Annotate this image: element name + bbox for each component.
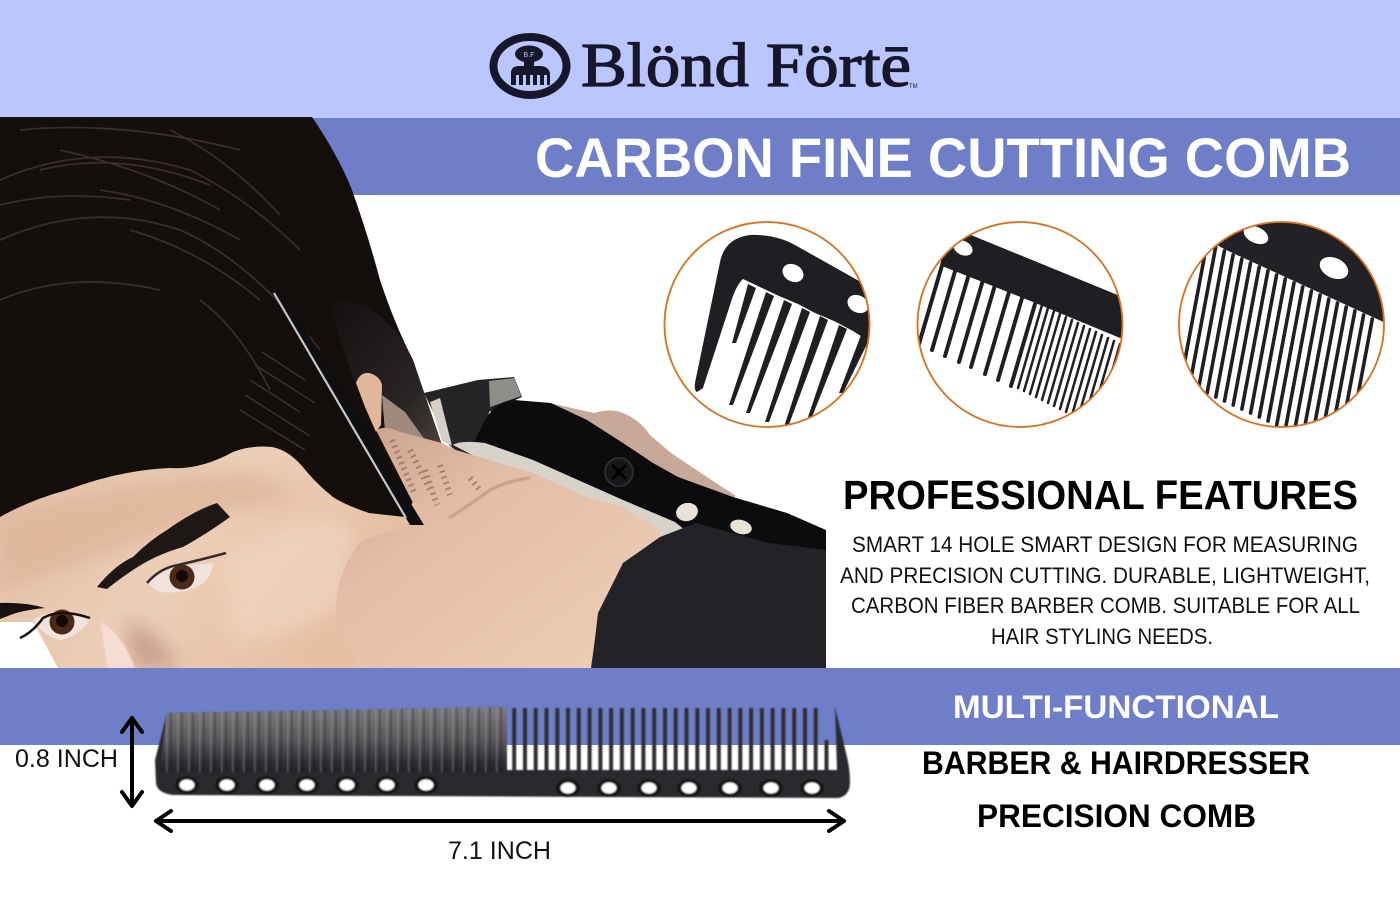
comb in hand <box>272 288 424 525</box>
ear <box>356 373 382 432</box>
clipper silver detail <box>489 378 521 407</box>
eye left <box>20 610 90 640</box>
hair highlights <box>0 128 320 390</box>
hand <box>336 428 660 668</box>
heading: professional features: PROFESSIONAL FEATURES <box>843 472 1358 518</box>
clipper blade teeth <box>430 398 452 446</box>
face <box>0 446 424 668</box>
finger hair <box>392 440 480 505</box>
clipper buttons <box>676 502 698 522</box>
comb holes <box>175 776 824 797</box>
circle: wide-tooth comb end <box>664 222 875 427</box>
eyebrow lower left <box>0 603 45 619</box>
features description <box>840 532 1370 649</box>
temple highlight <box>232 521 349 636</box>
arrow: comb width <box>156 811 844 831</box>
arrow: comb height <box>122 718 142 806</box>
trademark mark: TM <box>909 84 918 90</box>
comb diagram <box>155 707 850 798</box>
header band <box>0 0 1400 118</box>
detail circles <box>664 221 1385 428</box>
logo wordmark: Blönd Förtē <box>581 32 911 100</box>
bottom band <box>0 668 1400 745</box>
features description: CARBON FIBER BARBER COMB. SUITABLE FOR ALL <box>851 593 1360 618</box>
forehead shadow <box>0 470 300 590</box>
clipper light side <box>453 442 690 545</box>
features description: HAIR STYLING NEEDS. <box>991 624 1213 649</box>
nose highlight <box>100 622 135 668</box>
nose shadow <box>125 620 180 668</box>
sleeve <box>591 523 826 668</box>
subheading: multi-functional: MULTI-FUNCTIONAL <box>953 689 1279 725</box>
clipper head <box>424 377 522 455</box>
clipper screw <box>605 458 633 486</box>
circle: fine-tooth comb section <box>1178 221 1385 428</box>
skin behind ear <box>382 395 425 440</box>
fingers behind clipper <box>545 402 736 498</box>
width label: 7.1 INCH <box>448 837 551 865</box>
icon: logo comb emblem <box>494 37 566 95</box>
title: CARBON FINE CUTTING COMB <box>535 126 1351 189</box>
hair <box>0 117 442 517</box>
eyebrow <box>97 503 230 589</box>
icon: logo comb emblem: B.F <box>524 52 534 59</box>
comb body <box>155 707 850 798</box>
title band <box>0 118 1400 195</box>
subheading: precision comb: PRECISION COMB <box>977 798 1256 834</box>
comb fine teeth <box>160 707 507 772</box>
knuckle crease <box>449 478 530 518</box>
clipper body <box>470 400 826 560</box>
features description: SMART 14 HOLE SMART DESIGN FOR MEASURING <box>852 532 1358 557</box>
comb wide teeth <box>514 708 826 772</box>
height label: 0.8 INCH <box>15 745 118 773</box>
hair combed lines <box>240 352 315 450</box>
eye right <box>147 553 226 592</box>
logo <box>494 32 918 100</box>
photo: barber cutting hair with comb and clipper <box>0 117 826 668</box>
circle: mixed-tooth comb section <box>918 222 1126 430</box>
subheading: barber and hairdresser: BARBER & HAIRDRESSER <box>922 745 1310 781</box>
faded neck hair <box>340 308 442 443</box>
features description: AND PRECISION CUTTING. DURABLE, LIGHTWEIGHT, <box>840 563 1370 588</box>
